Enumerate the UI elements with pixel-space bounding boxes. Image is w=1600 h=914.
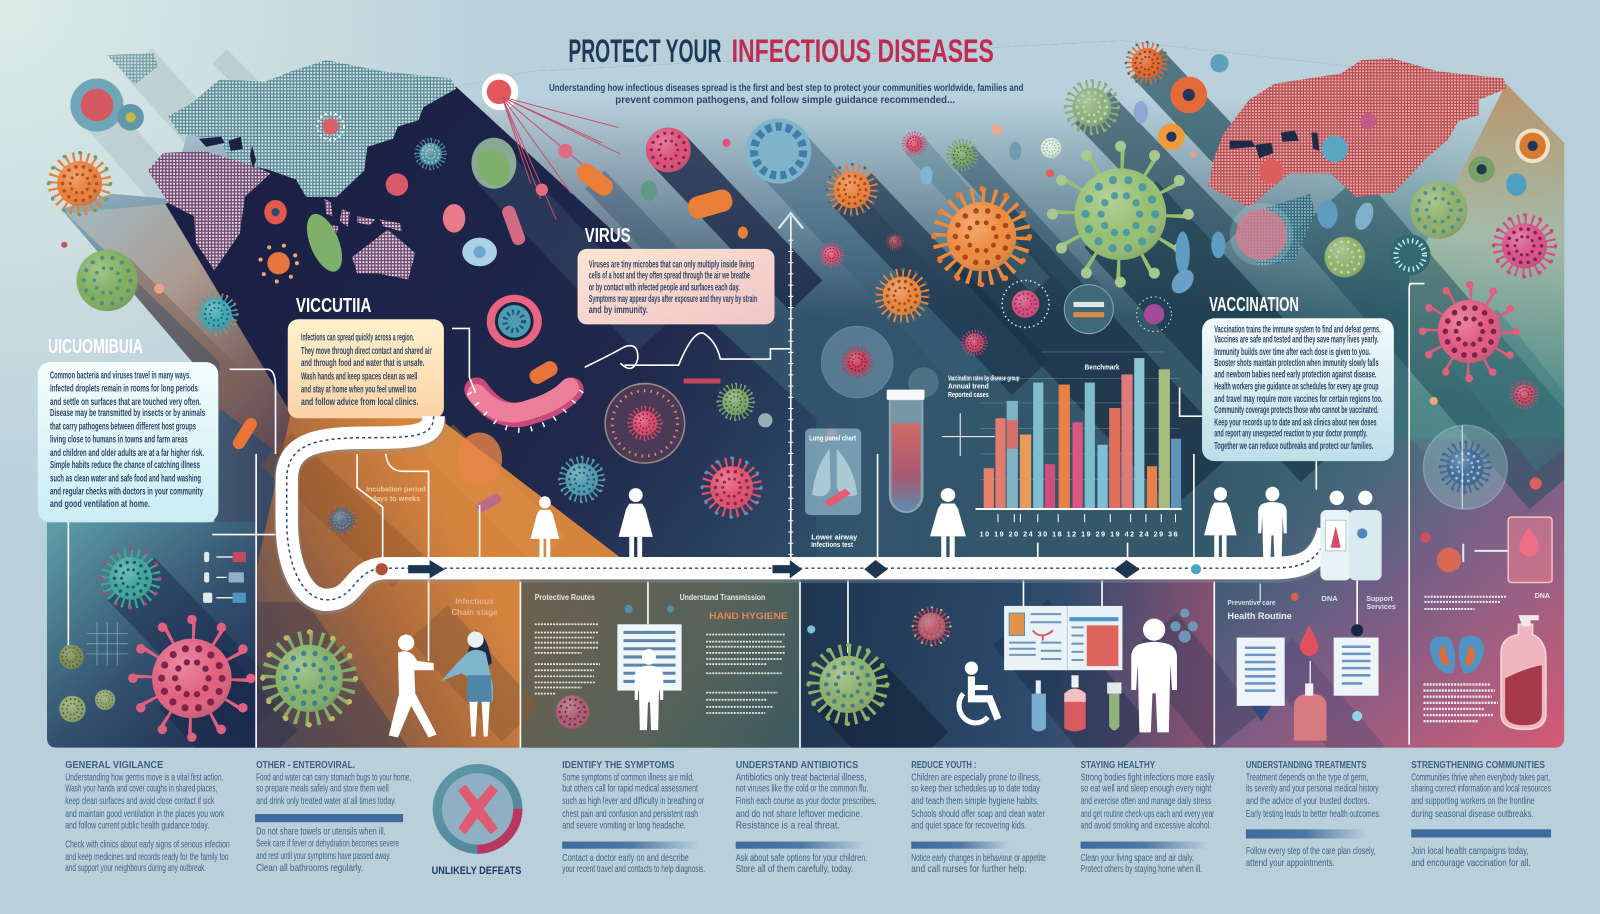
orange area labels: Incubation period: [366, 486, 426, 494]
text box: virus: [578, 249, 774, 324]
bottom column 1: GENERAL VIGILANCE: [65, 760, 164, 771]
bottom column 2: Seek care if fever or dehydration becomes severe: [256, 839, 399, 850]
right text lines and organs: [1423, 592, 1550, 721]
large green virus: [1052, 146, 1198, 298]
viruses above timeline: [328, 433, 761, 534]
text box: vaccination: Vaccines are safe and tested and they save many lives yearly.: [1214, 335, 1379, 346]
lower centre text panel: [535, 593, 788, 729]
bottom column 4: Finish each course as your doctor prescribes,: [736, 796, 877, 807]
bottom column 8: Join local health campaigns today,: [1411, 846, 1529, 857]
bottom column 3: such as high fever and difficulty in breathing or: [562, 796, 705, 807]
bottom column 4: Resistance is a real threat.: [736, 820, 840, 831]
text above clipboards: Support: [1366, 595, 1393, 603]
title: PROTECT YOUR: [568, 32, 721, 69]
bottom column 4: Antibiotics only treat bacterial illness,: [736, 772, 866, 783]
doctors in coats: [1320, 491, 1382, 580]
bottom column 1: and maintain good ventilation in the places you work: [65, 809, 225, 820]
lower virus: [807, 607, 951, 724]
orange area labels: Infectious: [455, 597, 494, 606]
green virus lower: [263, 632, 356, 725]
lower centre text panel: Protective Routes: [535, 593, 595, 602]
droplet panel and small cells: [1420, 477, 1552, 582]
bottom column 7: UNDERSTANDING TREATMENTS: [1246, 760, 1367, 771]
microbes centre: [821, 281, 1171, 439]
bottom column 1: and support your neighbours during any outbreak.: [65, 863, 206, 874]
heading: VIRUS: VIRUS: [585, 225, 631, 247]
bottom column 5: and teach them simple hygiene habits.: [911, 796, 1039, 807]
orange area labels: [366, 486, 498, 617]
viruses, lower left panel: [59, 549, 251, 737]
large pump bottle: [1501, 615, 1546, 729]
text box: left: that carry pathogens between different host groups: [50, 421, 196, 432]
bottom column 3: Some symptoms of common illness are mild,: [562, 772, 694, 783]
text box: vaccination: Keep your records up to date and ask clinics about new doses: [1214, 417, 1377, 428]
bottom column 2: OTHER - ENTEROVIRAL.: [256, 760, 355, 771]
text box: virus: or by contact with infected people and surfaces each day.: [589, 283, 740, 294]
vertical axis with arrow: [779, 213, 803, 561]
text above clipboards: Health Routine: [1228, 611, 1292, 621]
bottom column 7: Follow every step of the care plan closely,: [1246, 846, 1376, 857]
bottom column 2: and rest until your symptoms have passed away.: [256, 851, 391, 862]
bottom column 3: your recent travel and contacts to help diagnosis.: [562, 864, 705, 875]
text box: left: [38, 362, 218, 522]
bottom column 2: Do not share towels or utensils when ill.: [256, 826, 386, 837]
test tube: [887, 390, 924, 512]
x axis: [976, 509, 1182, 539]
text box: vaccination: and newborn babies need early protection against disease.: [1214, 369, 1377, 380]
text box: left: Infected droplets remain in rooms for long periods: [50, 384, 198, 395]
title: [568, 32, 994, 69]
document with person: [617, 624, 682, 730]
bottom column 4: Ask about safe options for your children.: [736, 853, 867, 864]
bars: [984, 358, 1181, 509]
bottom column 7: and the advice of your trusted doctors.: [1246, 796, 1369, 807]
text box: left: Disease may be transmitted by insects or by animals: [50, 408, 205, 419]
text above clipboards: DNA: [1321, 595, 1338, 603]
petri dish with virus: [605, 378, 772, 463]
bottom column 1: keep clean surfaces and avoid close contact if sick: [65, 796, 214, 807]
text box: orange: and stay at home when you feel unwell too: [301, 385, 416, 396]
bar chart: [942, 352, 1182, 539]
bottom column 1: Wash your hands and cover coughs in shared places,: [65, 784, 217, 795]
text box: left: and children and older adults are at a far higher risk.: [50, 448, 204, 459]
subtitle text: Understanding how infectious diseases spread is the first and best step to protect your communities worldwide, families and: [549, 83, 1024, 94]
text box: left: and good ventilation at home.: [50, 499, 150, 510]
bottom column 2: Food and water can carry stomach bugs to your home,: [256, 772, 411, 783]
bottom column 2: [255, 760, 411, 874]
bottom column 1: Understanding how germs move is a vital first action.: [65, 772, 223, 783]
bottom column 3: but others call for rapid medical assessment: [562, 784, 698, 795]
bottom column 5: Schools should offer soap and clean water: [911, 809, 1045, 820]
timeline markers: [408, 560, 1201, 578]
panel: diagonal gradient field: [41, 31, 1571, 760]
bottom column 8: and supporting workers on the frontline: [1411, 796, 1535, 807]
text box: vaccination: [1202, 318, 1394, 461]
bottom column 1: and keep medicines and records ready for the family too: [65, 852, 229, 863]
clipboards and blood drop: [1237, 624, 1379, 741]
connector lines: [68, 284, 1424, 748]
subtitle text: [549, 83, 1024, 106]
text box: left: living close to humans in towns and farm areas: [50, 435, 188, 446]
text box: vaccination: and travel may require more vaccines for certain regions too.: [1214, 394, 1383, 405]
lung document panel: Lower airway: [811, 534, 857, 542]
lung document panel: Infections test: [811, 541, 854, 549]
text box: left: Common bacteria and viruses travel in many ways.: [50, 370, 191, 381]
text box: vaccination: Health workers give guidance on schedules for every age group: [1214, 382, 1379, 393]
text box: orange: They move through direct contact and shared air: [301, 346, 432, 357]
open medical booklet: [1004, 606, 1122, 670]
chart gridlines: [980, 352, 1180, 479]
bottom column 5: [911, 760, 1046, 875]
bottom column 4: UNDERSTAND ANTIBIOTICS: [736, 760, 859, 771]
text box: vaccination: Vaccination trains the immune system to find and defeat germs.: [1214, 325, 1381, 336]
lower centre text panel: HAND HYGIENE: [709, 611, 788, 621]
text box: vaccination: Immunity builds over time after each dose is given to you.: [1214, 347, 1371, 358]
subtitle text: prevent common pathogens, and follow simple guidance recommended...: [615, 95, 955, 106]
text box: left: Simple habits reduce the chance of catching illness: [50, 460, 200, 471]
microbes right side: [1211, 129, 1555, 409]
lower centre text panel: Understand Transmission: [680, 593, 765, 602]
bottom column 5: Children are especially prone to illness,: [911, 772, 1041, 783]
wheelchair icon: [959, 662, 998, 723]
bottom column 1: and follow current public health guidance today.: [65, 820, 209, 831]
title: INFECTIOUS DISEASES: [732, 32, 994, 69]
text box: vaccination: and report any unexpected reaction to your doctor promptly.: [1214, 429, 1368, 440]
icon: red cross warning: UNLIKELY DEFEATS: [432, 865, 522, 877]
small microbes upper left: [49, 79, 237, 335]
bottom column 3: chest pain and confusion and persistent rash: [562, 809, 698, 820]
chart labels: Reported cases: [948, 391, 989, 399]
large orange virus: [820, 189, 1030, 323]
bottom column 2: so prepare meals safely and store them well: [256, 784, 389, 795]
bottom column 5: and call nurses for further help.: [911, 864, 1027, 875]
text box: virus: Viruses are tiny microbes that can only multiply inside living: [589, 259, 754, 270]
heading: UICUOMIBUIA: UICUOMIBUIA: [48, 336, 143, 358]
text above clipboards: [1228, 583, 1396, 621]
bottom column 6: and avoid smoking and excessive alcohol.: [1081, 820, 1211, 831]
text box: virus: cells of a host and they often spread through the air we breathe: [589, 270, 750, 281]
x axis: 10 19 20 24 30 18 12 19 29 19 42 24 29 36: [980, 531, 1178, 539]
text box: left: such as clean water and safe food and hand washing: [50, 473, 201, 484]
big man figure: [1131, 608, 1198, 732]
text box: orange: and through food and water that is unsafe.: [301, 358, 425, 369]
bottom column 6: Clean your living space and air daily.: [1081, 853, 1194, 864]
bottom column 4: and do not share leftover medicine.: [736, 809, 862, 820]
bottom column 1: Check with clinics about early signs of serious infection: [65, 840, 230, 851]
bottom column 7: Treatment depends on the type of germ,: [1246, 772, 1368, 783]
bottom column 7: its severity and your personal medical history: [1246, 784, 1379, 795]
text box: orange: [288, 319, 444, 418]
bottom column 2: and drink only treated water at all times today.: [256, 796, 396, 807]
bottom column 2: Clean all bathrooms regularly.: [256, 863, 363, 874]
bottom column 4: [736, 760, 877, 875]
lung document panel: [805, 428, 861, 549]
chart labels: Annual trend: [948, 383, 989, 391]
heading: VICCUTIIA: VICCUTIIA: [296, 295, 372, 317]
bottom column 8: and encourage vaccination for all.: [1411, 858, 1531, 869]
world map, left, dotted: [107, 53, 456, 280]
bottom column 4: Store all of them carefully, today.: [736, 864, 853, 875]
text box: virus: Symptoms may appear days after exposure and they vary by strain: [589, 294, 757, 305]
bottom column 8: [1411, 760, 1551, 869]
chart labels: Vaccination rates by disease group: [948, 374, 1020, 382]
bottom column 8: during seasonal disease outbreaks.: [1411, 809, 1534, 820]
orange area labels: days to weeks: [372, 495, 420, 503]
road timeline: [287, 416, 1329, 602]
text box: orange: Infections can spread quickly across a region.: [301, 333, 414, 344]
bottom column 5: Notice early changes in behaviour or appetite: [911, 853, 1046, 864]
microbes top centre: [641, 42, 1229, 239]
bottom column 3: IDENTIFY THE SYMPTOMS: [562, 760, 675, 771]
bottom column 7: Early testing leads to better health outcomes.: [1246, 809, 1381, 820]
bottom column 7: [1246, 760, 1381, 869]
microbe with radiating lines: [482, 73, 620, 219]
people above timeline: [531, 487, 1287, 563]
bottom column 8: STRENGTHENING COMMUNITIES: [1411, 760, 1545, 771]
lung document panel: Lung panel chart: [809, 435, 857, 443]
soft map shadows, upper left: [97, 56, 265, 194]
bacterium, pink: [469, 388, 584, 430]
text above clipboards: Services: [1366, 603, 1396, 611]
bottom column 7: attend your appointments.: [1246, 858, 1335, 869]
bottom column 6: STAYING HEALTHY: [1081, 760, 1156, 771]
text box: vaccination: Together we can reduce outbreaks and protect our families.: [1214, 441, 1374, 452]
right text lines and organs: DNA: [1535, 592, 1550, 600]
glass sphere with virus: [1423, 425, 1507, 509]
bottom column 6: Strong bodies fight infections more easily: [1081, 772, 1214, 783]
bottles: [1032, 675, 1121, 731]
bottom column 4: not viruses like the cold or the common flu.: [736, 784, 868, 795]
text box: orange: Wash hands and keep spaces clean as well: [301, 371, 417, 382]
bottom column 5: REDUCE YOUTH :: [911, 760, 977, 771]
bottom column 1: [65, 760, 230, 874]
bottom column 5: and quiet space for recovering kids.: [911, 820, 1027, 831]
bottom column 5: so keep their schedules up to date today: [911, 784, 1040, 795]
bottom column 3: Contact a doctor early on and describe: [562, 853, 689, 864]
bottom column 6: and exercise often and manage daily stress: [1081, 796, 1211, 807]
microbes over the navy band: [260, 138, 542, 348]
text box: vaccination: Community coverage protects those who cannot be vaccinated.: [1214, 405, 1379, 416]
chart labels: Benchmark: [1085, 363, 1119, 371]
bottom column 6: and get routine check-ups each and every year: [1081, 809, 1215, 820]
chart labels: [942, 363, 1119, 456]
bottom column 6: Protect others by staying home when ill.: [1081, 864, 1202, 875]
small legend, left panel: [203, 552, 246, 603]
orange pills: [231, 160, 735, 451]
text above clipboards: Preventive care: [1228, 598, 1276, 607]
walking man and woman: [389, 630, 493, 738]
icon: red cross warning: [432, 764, 522, 877]
text box: vaccination: Booster shots maintain protection when immunity slowly falls: [1214, 358, 1379, 369]
bottom column 6: [1081, 760, 1215, 875]
text box: orange: and follow advice from local clinics.: [301, 397, 419, 408]
heading: VACCINATION: VACCINATION: [1209, 294, 1299, 316]
text box: left: and settle on surfaces that are touched very often.: [50, 397, 201, 408]
text box: virus: and by immunity.: [589, 305, 648, 316]
orange area labels: Chain stage: [451, 608, 498, 617]
bottom column 3: [562, 760, 705, 875]
world map, right, dotted red: [1208, 58, 1506, 266]
bottom column 3: and severe vomiting or long headache.: [562, 820, 686, 831]
bottom column 6: so eat well and sleep enough every night: [1081, 784, 1211, 795]
text box: left: and regular checks with doctors in your community: [50, 487, 203, 498]
